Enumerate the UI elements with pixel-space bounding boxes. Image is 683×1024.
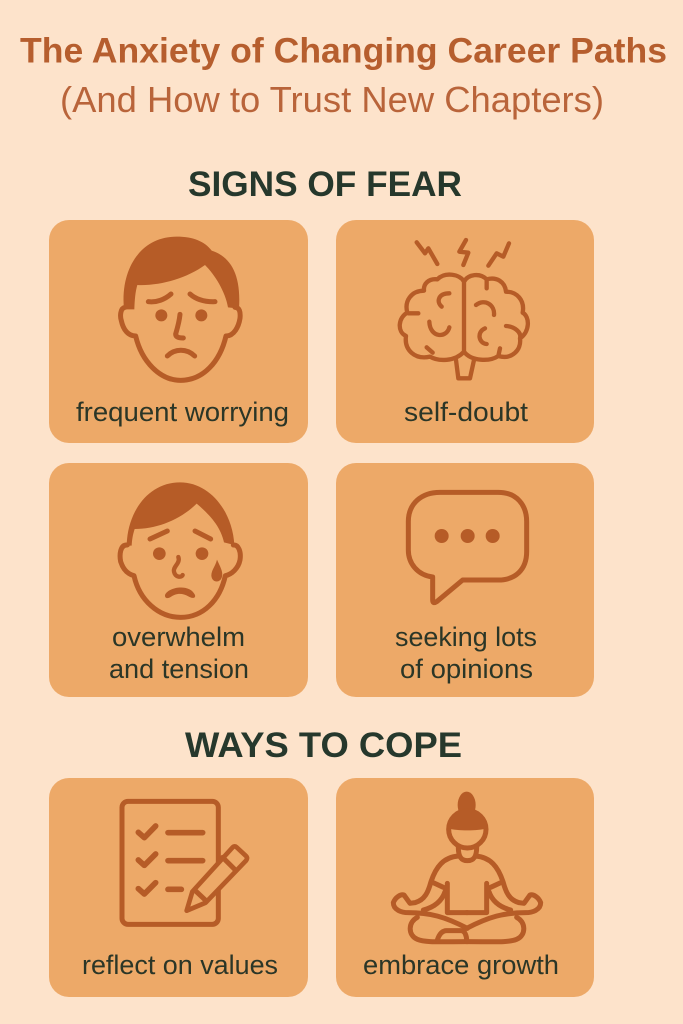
heading: signs of fear: SIGNS OF FEAR: [188, 165, 462, 204]
label: and tension: [109, 654, 249, 684]
label: seeking lots: [395, 622, 537, 652]
label: reflect on values: [82, 950, 278, 980]
title: The Anxiety of Changing Career Paths: [20, 32, 667, 70]
icon: brain with lightning: [400, 240, 528, 378]
label: overwhelm: [112, 622, 245, 652]
label: embrace growth: [363, 950, 559, 980]
icon: meditating person: [393, 792, 541, 942]
icon: speech bubble: [408, 492, 527, 603]
panel: seeking lots of opinions: [336, 463, 594, 697]
right arm and leg: [467, 856, 541, 942]
label: of opinions: [400, 654, 533, 684]
label: frequent worrying: [76, 397, 289, 427]
panel: embrace growth: [336, 778, 594, 997]
foot: [437, 931, 467, 941]
subtitle: (And How to Trust New Chapters): [60, 79, 604, 120]
left arm and leg: [393, 856, 467, 942]
panel: overwhelm and tension: [49, 463, 308, 697]
panel: self-doubt: [336, 220, 594, 443]
panel: reflect on values: [49, 778, 308, 997]
label: self-doubt: [404, 397, 529, 427]
icon: crying face: [120, 482, 240, 617]
panel: frequent worrying: [49, 220, 308, 443]
heading: ways to cope: WAYS TO COPE: [185, 726, 462, 765]
icon: checklist and pencil: [122, 801, 247, 924]
icon: worried face: [121, 237, 240, 380]
